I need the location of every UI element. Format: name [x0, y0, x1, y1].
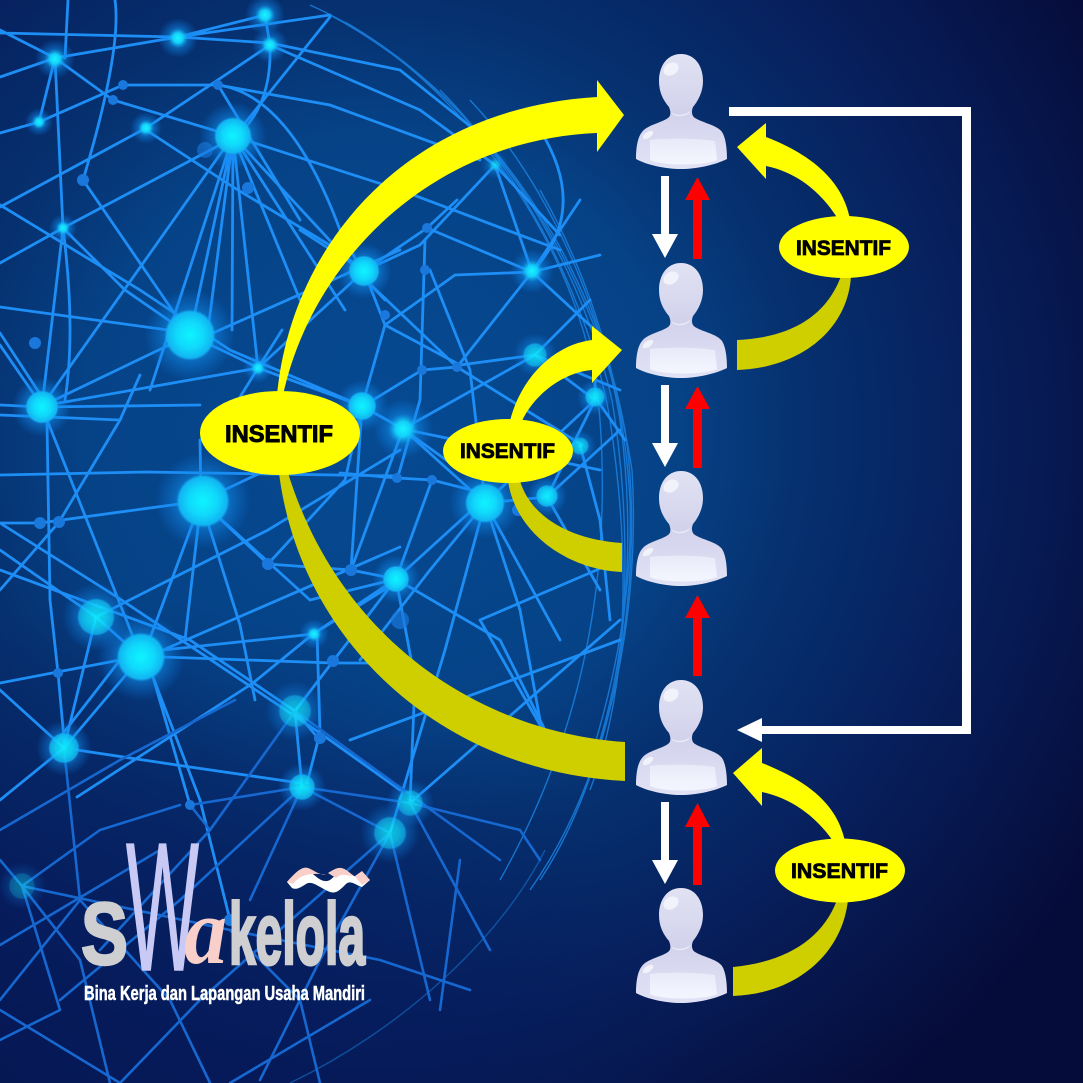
logo letter a: a: [184, 880, 227, 984]
logo ribbon mark: [287, 868, 370, 893]
person 1: [636, 54, 727, 169]
label: lower INSENTIF oval: [775, 838, 905, 902]
logo letter S: S: [81, 884, 128, 983]
yellow arrow: large INSENTIF to top person: [277, 80, 624, 395]
yellow arrow: upper INSENTIF to top person: [737, 123, 850, 219]
lower left background shade: [0, 600, 720, 1083]
dark yellow band: fifth person to lower INSENTIF: [733, 900, 848, 996]
yellow arrow: lower INSENTIF to fourth person: [733, 748, 845, 841]
red up arrow 2 to 1: [685, 177, 710, 259]
logo: Swakelola: W: [126, 804, 199, 1009]
white down arrow 1 to 2: [652, 176, 678, 258]
dark yellow band: third person to middle INSENTIF: [508, 481, 622, 572]
person 4: [636, 680, 727, 795]
red up arrow 3 to 2: [685, 386, 710, 468]
logo word kelola: kelola: [229, 886, 365, 983]
globe network lines upper: [0, 0, 625, 920]
network globe: [0, 0, 633, 1083]
label: lower INSENTIF oval: INSENTIF: [791, 860, 888, 883]
globe outer rim arcs: [290, 5, 633, 1083]
label: large INSENTIF oval: INSENTIF: [225, 421, 333, 448]
dim network junctions: [29, 80, 524, 926]
dark yellow band: lower person to large INSENTIF: [279, 473, 625, 781]
yellow arrow: middle INSENTIF to second person: [510, 326, 622, 421]
red up arrow 4 to 3: [685, 595, 710, 676]
dark yellow band: second person to upper INSENTIF: [737, 276, 851, 370]
logo: Swakelola: [81, 804, 370, 1009]
person 5: [636, 888, 727, 1003]
label: middle INSENTIF oval: INSENTIF: [460, 440, 555, 463]
white down arrow 4 to 5: [652, 802, 678, 884]
red up arrow 5 to 4: [685, 803, 710, 885]
logo tagline: Bina Kerja dan Lapangan Usaha Mandiri: [84, 983, 365, 1005]
label: large INSENTIF oval: [200, 391, 360, 475]
person 2: [636, 263, 727, 378]
label: upper INSENTIF oval: INSENTIF: [796, 237, 891, 260]
globe network lines lower: [0, 700, 540, 1083]
globe glowing nodes: [0, 0, 613, 910]
person 3: [636, 471, 727, 586]
label: upper INSENTIF oval: [779, 216, 909, 278]
white down arrow 2 to 3: [652, 385, 678, 467]
label: middle INSENTIF oval: [443, 419, 573, 483]
white feedback connector arrow: [729, 107, 971, 742]
